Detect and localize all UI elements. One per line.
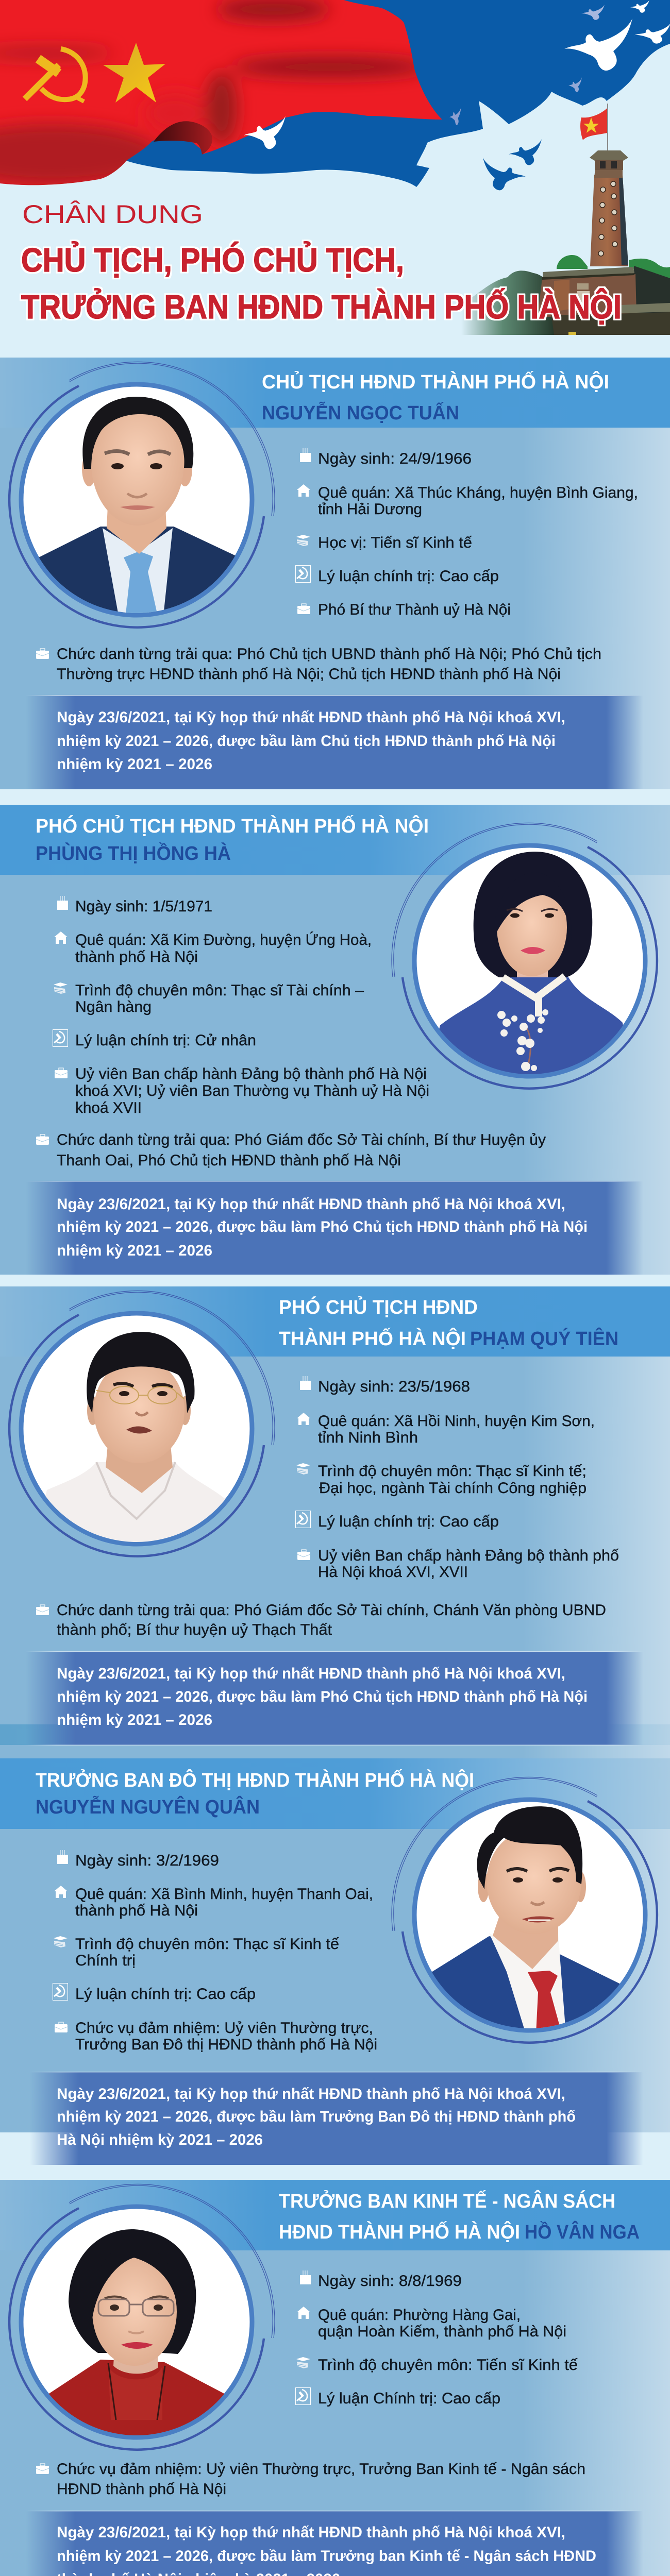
callout: election note: Ngày 23/6/2021, tại Kỳ họp thứ nhất HĐND thành phố Hà Nội khoá XVI, <box>57 1665 565 1682</box>
heading: position: TRƯỞNG BAN KINH TẾ - NGÂN SÁCH <box>279 2190 615 2212</box>
info row: party role <box>297 1547 619 1581</box>
info row: past positions <box>36 646 601 683</box>
heading: name: PHẠM QUÝ TIÊN <box>470 1327 618 1350</box>
callout: election note <box>26 2511 643 2576</box>
info row: political theory: Lý luận chính trị: Cao cấp <box>318 568 499 585</box>
Hanoi flag tower illustration <box>461 150 670 335</box>
panel background <box>0 1758 670 2132</box>
info row: hometown <box>54 1886 373 1919</box>
info row: hometown: tỉnh Ninh Bình <box>318 1429 418 1446</box>
info row: expertise <box>54 1936 339 1969</box>
callout: election note: nhiệm kỳ 2021 – 2026 <box>57 1711 212 1728</box>
header band <box>0 358 670 428</box>
info row: current post: Chức vụ đảm nhiệm: Uỷ viên Thường trực, <box>75 2020 373 2037</box>
info row: party role <box>55 1065 429 1116</box>
portrait frame <box>9 362 275 628</box>
info row: hometown: quận Hoàn Kiếm, thành phố Hà Nội <box>318 2323 566 2340</box>
info row: political theory: Lý luận chính trị: Cử nhân <box>75 1032 256 1049</box>
lower background strip <box>0 1724 670 1745</box>
heading: position: HĐND THÀNH PHỐ HÀ NỘI <box>279 2220 520 2243</box>
info row: political theory: Lý luận Chính trị: Cao cấp <box>318 2390 500 2407</box>
title line: Chủ tịch, Phó Chủ tịch: CHỦ TỊCH, PHÓ CHỦ TỊCH, <box>21 241 404 279</box>
heading: position: THÀNH PHỐ HÀ NỘI <box>279 1327 466 1350</box>
heading: position <box>279 2190 615 2243</box>
callout: election note: nhiệm kỳ 2021 – 2026, được bầu làm Phó Chủ tịch HĐND thành phố Hà Nội <box>57 1688 588 1705</box>
info row: political theory: Lý luận chính trị: Cao cấp <box>318 1513 499 1530</box>
blue flag with dove-shaped edge <box>126 0 670 187</box>
info row: hometown: Quê quán: Xã Hồi Ninh, huyện Kim Sơn, <box>318 1413 595 1430</box>
info row: hometown: thành phố Hà Nội <box>75 948 198 965</box>
callout: election note: Ngày 23/6/2021, tại Kỳ họp thứ nhất HĐND thành phố Hà Nội khoá XVI, <box>57 1196 565 1213</box>
info row: current post: Trưởng Ban Đô thị HĐND thành phố Hà Nội <box>75 2036 377 2053</box>
info row: hometown <box>297 2307 566 2340</box>
callout: election note: Ngày 23/6/2021, tại Kỳ họp thứ nhất HĐND thành phố Hà Nội khoá XVI, <box>57 709 565 726</box>
info row: hometown: Quê quán: Xã Thúc Kháng, huyện Bình Giang, <box>318 484 638 501</box>
heading: position: PHÓ CHỦ TỊCH HĐND THÀNH PHỐ HÀ NỘI <box>36 814 429 837</box>
info row: past positions <box>36 1131 546 1169</box>
info row: degree: Học vị: Tiến sĩ Kinh tế <box>318 534 472 551</box>
callout: election note: nhiệm kỳ 2021 – 2026, được bầu làm Trưởng ban Kinh tế - Ngân sách HĐND <box>57 2548 596 2565</box>
header band <box>0 805 670 875</box>
info row: expertise: Trình độ chuyên môn: Thạc sĩ Kinh tế <box>75 1936 339 1953</box>
heading: position <box>279 1296 478 1350</box>
panel background <box>0 358 670 789</box>
info row: hometown: thành phố Hà Nội <box>75 1902 198 1919</box>
portrait frame <box>9 1291 275 1556</box>
info row: hometown: Quê quán: Phường Hàng Gai, <box>318 2307 521 2324</box>
info row: expertise: Trình độ chuyên môn: Tiến sĩ Kinh tế <box>318 2357 578 2374</box>
info row: political theory: Lý luận chính trị: Cao cấp <box>75 1986 256 2003</box>
title line: CHÂN DUNG: CHÂN DUNG <box>22 200 203 229</box>
info row: party role: Phó Bí thư Thành uỷ Hà Nội <box>318 601 511 618</box>
panel: Hồ Vân Nga <box>0 2180 670 2576</box>
info row: past positions <box>36 1602 606 1638</box>
info row: birth date: Ngày sinh: 24/9/1966 <box>318 450 472 467</box>
header band <box>0 1758 670 1829</box>
info row: hometown <box>54 931 372 965</box>
info row: hometown: tỉnh Hải Dương <box>318 501 422 518</box>
heading: position: CHỦ TỊCH HĐND THÀNH PHỐ HÀ NỘI <box>262 370 609 393</box>
heading: position: PHÓ CHỦ TỊCH HĐND <box>279 1296 478 1318</box>
info row: hometown <box>297 484 638 518</box>
callout: election note <box>30 2072 643 2165</box>
info row: expertise: Trình độ chuyên môn: Thạc sĩ Tài chính – <box>75 982 364 999</box>
info row: party role: Uỷ viên Ban chấp hành Đảng bộ thành phố Hà Nội <box>75 1065 427 1082</box>
info row: current post <box>36 2461 585 2498</box>
info row: past positions: Chức danh từng trải qua: Phó Chủ tịch UBND thành phố Hà Nội; Phó Chủ tịch <box>57 646 601 663</box>
info row: expertise <box>296 1463 587 1497</box>
callout: election note: nhiệm kỳ 2021 – 2026 <box>57 756 212 773</box>
info row: past positions: Chức danh từng trải qua: Phó Giám đốc Sở Tài chính, Bí thư Huyện ủy <box>57 1131 546 1148</box>
info row: expertise: Đại học, ngành Tài chính Công nghiệp <box>319 1480 587 1497</box>
info row: birth date: Ngày sinh: 8/8/1969 <box>318 2273 462 2290</box>
callout: election note: Hà Nội nhiệm kỳ 2021 – 2026 <box>57 2131 263 2148</box>
callout: election note <box>26 695 643 789</box>
panel background <box>0 2180 670 2576</box>
info row: expertise <box>54 982 364 1015</box>
info row: hometown <box>297 1413 595 1446</box>
portrait: Nguyễn Ngọc Tuấn <box>39 397 235 613</box>
info row: party role: khoá XVII <box>75 1099 142 1116</box>
heading: name: PHÙNG THỊ HỒNG HÀ <box>36 842 231 865</box>
panel: Nguyễn Ngọc Tuấn <box>0 358 670 789</box>
info row: expertise: Chính trị <box>75 1952 136 1969</box>
info row: past positions: thành phố; Bí thư huyện uỷ Thạch Thất <box>57 1621 332 1638</box>
portrait: Hồ Vân Nga <box>28 2229 245 2441</box>
header band <box>0 2180 670 2250</box>
info row: party role: khoá XVI; Uỷ viên Ban Thường vụ Thành uỷ Hà Nội <box>75 1082 429 1099</box>
callout: election note <box>26 1651 643 1745</box>
portrait frame <box>392 823 657 1089</box>
red party flag <box>0 0 443 187</box>
title <box>21 200 622 326</box>
info row: birth date: Ngày sinh: 3/2/1969 <box>75 1852 219 1869</box>
callout: election note <box>26 1181 643 1275</box>
info row: party role: Hà Nội khoá XVI, XVII <box>318 1564 468 1581</box>
info row: expertise: Ngân hàng <box>75 998 152 1015</box>
callout: election note: Ngày 23/6/2021, tại Kỳ họp thứ nhất HĐND thành phố Hà Nội khoá XVI, <box>57 2524 565 2541</box>
heading: position: TRƯỞNG BAN ĐÔ THỊ HĐND THÀNH PHỐ HÀ NỘI <box>36 1768 474 1791</box>
callout: election note: nhiệm kỳ 2021 – 2026, được bầu làm Trưởng Ban Đô thị HĐND thành phố <box>57 2108 576 2125</box>
panel: Phùng Thị Hồng Hà <box>0 805 670 1275</box>
portrait frame <box>9 2184 275 2450</box>
info row: current post: HĐND thành phố Hà Nội <box>57 2481 226 2498</box>
header band <box>0 1286 670 1357</box>
panel background <box>0 1286 670 1758</box>
header banner <box>0 0 670 335</box>
info row: past positions: Chức danh từng trải qua: Phó Giám đốc Sở Tài chính, Chánh Văn phòng UBND <box>57 1602 606 1619</box>
panel background <box>0 805 670 1275</box>
info row: hometown: Quê quán: Xã Kim Đường, huyện Ứng Hoà, <box>75 931 372 948</box>
heading: name: HỒ VÂN NGA <box>525 2221 640 2243</box>
panel: Nguyễn Nguyên Quân <box>0 1758 670 2165</box>
info row: current post: Chức vụ đảm nhiệm: Uỷ viên Thường trực, Trưởng Ban Kinh tế - Ngân sách <box>57 2461 585 2478</box>
icon: doves <box>244 0 670 190</box>
info row: past positions: Thường trực HĐND thành phố Hà Nội; Chủ tịch HĐND thành phố Hà Nội <box>57 666 561 683</box>
portrait: Phạm Quý Tiên <box>34 1332 240 1547</box>
info row: expertise: Trình độ chuyên môn: Thạc sĩ Kinh tế; <box>318 1463 587 1480</box>
icon: national flag on the pole <box>580 104 608 150</box>
callout: election note: nhiệm kỳ 2021 – 2026 <box>57 1242 212 1259</box>
icon: hammer and sickle <box>25 49 86 101</box>
callout: election note: nhiệm kỳ 2021 – 2026, được bầu làm Chủ tịch HĐND thành phố Hà Nội <box>57 733 556 750</box>
info row: party role: Uỷ viên Ban chấp hành Đảng bộ thành phố <box>318 1547 619 1564</box>
callout: election note: nhiệm kỳ 2021 – 2026, được bầu làm Phó Chủ tịch HĐND thành phố Hà Nội <box>57 1218 588 1235</box>
portrait: Nguyễn Nguyên Quân <box>422 1806 638 2033</box>
heading: name: NGUYỄN NGUYÊN QUÂN <box>36 1795 260 1818</box>
icon: yellow star <box>103 43 165 103</box>
info row: past positions: Thanh Oai, Phó Chủ tịch HĐND thành phố Hà Nội <box>57 1152 401 1169</box>
portrait: Phùng Thị Hồng Hà <box>427 852 633 1079</box>
heading: name: NGUYỄN NGỌC TUẤN <box>262 401 459 424</box>
panel: Phạm Quý Tiên <box>0 1286 670 1758</box>
info row: current post <box>55 2020 377 2053</box>
portrait frame <box>392 1777 657 2043</box>
callout: election note: Ngày 23/6/2021, tại Kỳ họp thứ nhất HĐND thành phố Hà Nội khoá XVI, <box>57 2086 565 2103</box>
info row: hometown: Quê quán: Xã Bình Minh, huyện Thanh Oai, <box>75 1886 373 1903</box>
info row: birth date: Ngày sinh: 1/5/1971 <box>75 898 212 915</box>
info row: birth date: Ngày sinh: 23/5/1968 <box>318 1378 470 1395</box>
